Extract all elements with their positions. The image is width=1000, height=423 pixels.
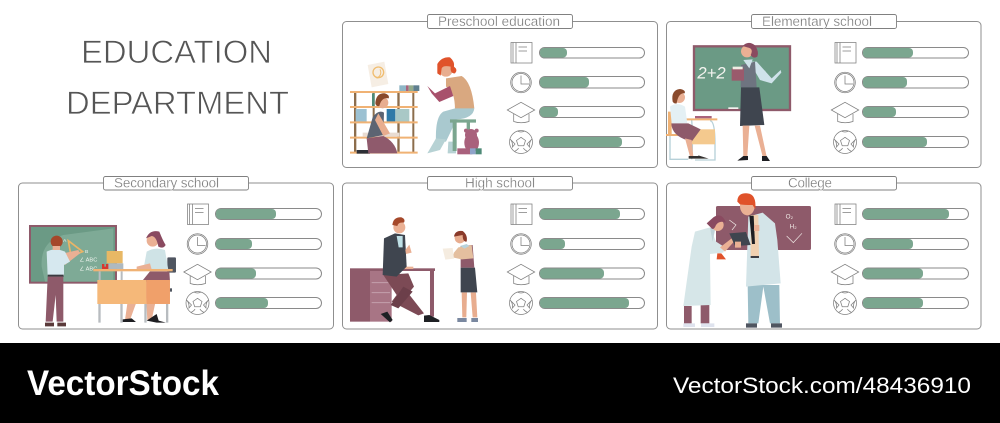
panel: high school [342, 176, 658, 329]
heading: secondary school: Secondary school [114, 176, 219, 190]
progress bar: study [540, 208, 644, 220]
progress bar: study [216, 208, 322, 220]
icon: book [511, 42, 532, 63]
panel: college [666, 176, 981, 329]
progress bar: time [862, 76, 968, 88]
illustration: pupil at board and teacher at desk: ∠ ABC [79, 257, 97, 264]
panel: secondary school [18, 176, 334, 329]
heading: elementary school: Elementary school [762, 14, 872, 29]
icon: book [511, 204, 532, 224]
illustration: two scientists in lab coats: O₂ [786, 213, 794, 220]
progress bar: graduation [540, 106, 644, 118]
icon: clock [835, 234, 855, 254]
illustration: teacher at chalkboard with pupil: 2+2 [696, 64, 726, 83]
icon: clock [187, 234, 208, 254]
illustration: pupil at board and teacher at desk: B [85, 249, 89, 255]
icon: football [834, 130, 856, 154]
illustration: two scientists in lab coats [683, 193, 811, 328]
icon: football [186, 292, 209, 314]
panel: elementary school [666, 14, 981, 168]
icon: clock [511, 234, 531, 254]
title: EDUCATION [81, 34, 272, 70]
icon: clock [511, 72, 531, 93]
progress bar: graduation [540, 268, 644, 279]
icon: football [834, 292, 856, 314]
illustration: two scientists in lab coats: H₂ [790, 224, 797, 231]
footer url text: VectorStock.com/48436910 [673, 373, 971, 398]
footer logo text: VectorStock [27, 364, 220, 403]
title [66, 34, 289, 121]
progress bar: sport [540, 298, 644, 308]
progress bar: study [862, 208, 968, 220]
heading: college [752, 176, 896, 190]
progress bar: time [540, 76, 644, 88]
icon: graduation cap [507, 264, 535, 285]
panel: preschool education [342, 14, 658, 168]
footer band [0, 343, 1000, 423]
illustration: pupil at board and teacher at desk [30, 226, 176, 326]
heading: high school [428, 176, 572, 190]
icon: book [835, 204, 856, 224]
icon: graduation cap [831, 264, 859, 285]
heading: high school: High school [465, 176, 535, 190]
icon: football [510, 292, 532, 314]
progress bar: sport [540, 136, 644, 148]
illustration: teacher on desk with student [350, 217, 478, 322]
icon: graduation cap [507, 102, 535, 123]
illustration: pupil at board and teacher at desk: ∠ ABC [79, 265, 97, 272]
progress bar: study [540, 48, 644, 58]
illustration: pupil at board and teacher at desk: A [63, 238, 67, 244]
illustration: teacher at chalkboard with pupil [666, 43, 790, 161]
progress bar: sport [216, 298, 322, 308]
progress bar: sport [862, 136, 968, 148]
progress bar: time [216, 238, 322, 250]
icon: graduation cap [184, 264, 211, 285]
icon: clock [835, 72, 855, 93]
progress bar: time [862, 238, 968, 250]
icon: book [835, 42, 856, 63]
heading: college: College [788, 176, 832, 190]
icon: book [188, 204, 208, 224]
icon: football [510, 130, 532, 154]
icon: graduation cap [831, 102, 859, 123]
progress bar: study [862, 48, 968, 58]
progress bar: sport [862, 298, 968, 308]
heading: preschool education: Preschool education [438, 14, 560, 29]
progress bar: graduation [216, 268, 322, 279]
progress bar: graduation [862, 106, 968, 118]
illustration: teacher reading to child by bookshelf [350, 57, 482, 154]
progress bar: time [540, 238, 644, 250]
progress bar: graduation [862, 268, 968, 279]
title: DEPARTMENT [66, 85, 289, 121]
